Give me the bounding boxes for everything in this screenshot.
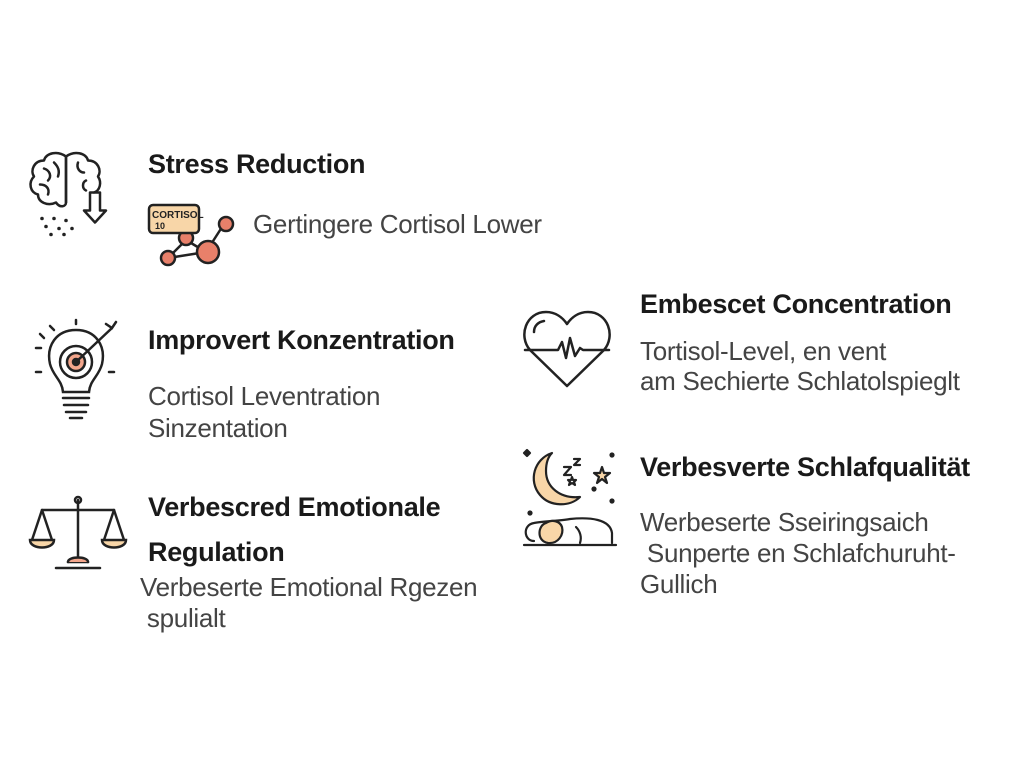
text: cortisol level: am Sechierte Schlatolspieglt	[640, 366, 960, 396]
text: emotional	[140, 572, 477, 633]
title: Stress Reduction: Stress Reduction	[148, 149, 365, 179]
title: Emotionale Regulation: Verbescred Emotionale	[148, 492, 440, 522]
text: cortisol level	[640, 336, 960, 396]
text: concentration	[148, 381, 380, 443]
title: Embescet Concentration: Embescet Concentration	[640, 289, 951, 319]
icon: cortisol molecule: 10	[155, 221, 165, 231]
text: sleep: Gullich	[640, 569, 717, 599]
icon: brain with down arrow	[29, 152, 108, 236]
text: emotional: spulialt	[147, 603, 225, 633]
text: sleep: Werbeserte Sseiringsaich	[640, 507, 929, 537]
icon: cortisol molecule: CORTISOL	[152, 210, 204, 221]
title: Emotionale Regulation	[148, 492, 440, 567]
icon: moon and sleeping person	[522, 448, 618, 546]
text: sleep: Sunperte en Schlafchuruht-	[647, 538, 956, 568]
text: sleep	[640, 507, 956, 599]
icon: lightbulb target	[34, 318, 118, 420]
text: cortisol: Gertingere Cortisol Lower	[253, 209, 542, 239]
icon: cortisol molecule	[148, 204, 234, 266]
title: Emotionale Regulation: Regulation	[148, 537, 284, 567]
title: Verbesverte Schlafqualität: Verbesverte Schlafqualität	[640, 452, 970, 482]
text: emotional: Verbeserte Emotional Rgezen	[140, 572, 477, 602]
icon: scales	[28, 496, 128, 570]
title: Improvert Konzentration: Improvert Konzentration	[148, 325, 455, 355]
text: concentration: Sinzentation	[148, 413, 288, 443]
icon: heart with pulse	[523, 310, 611, 388]
text: concentration: Cortisol Leventration	[148, 381, 380, 411]
text: cortisol level: Tortisol-Level, en vent	[640, 336, 886, 366]
